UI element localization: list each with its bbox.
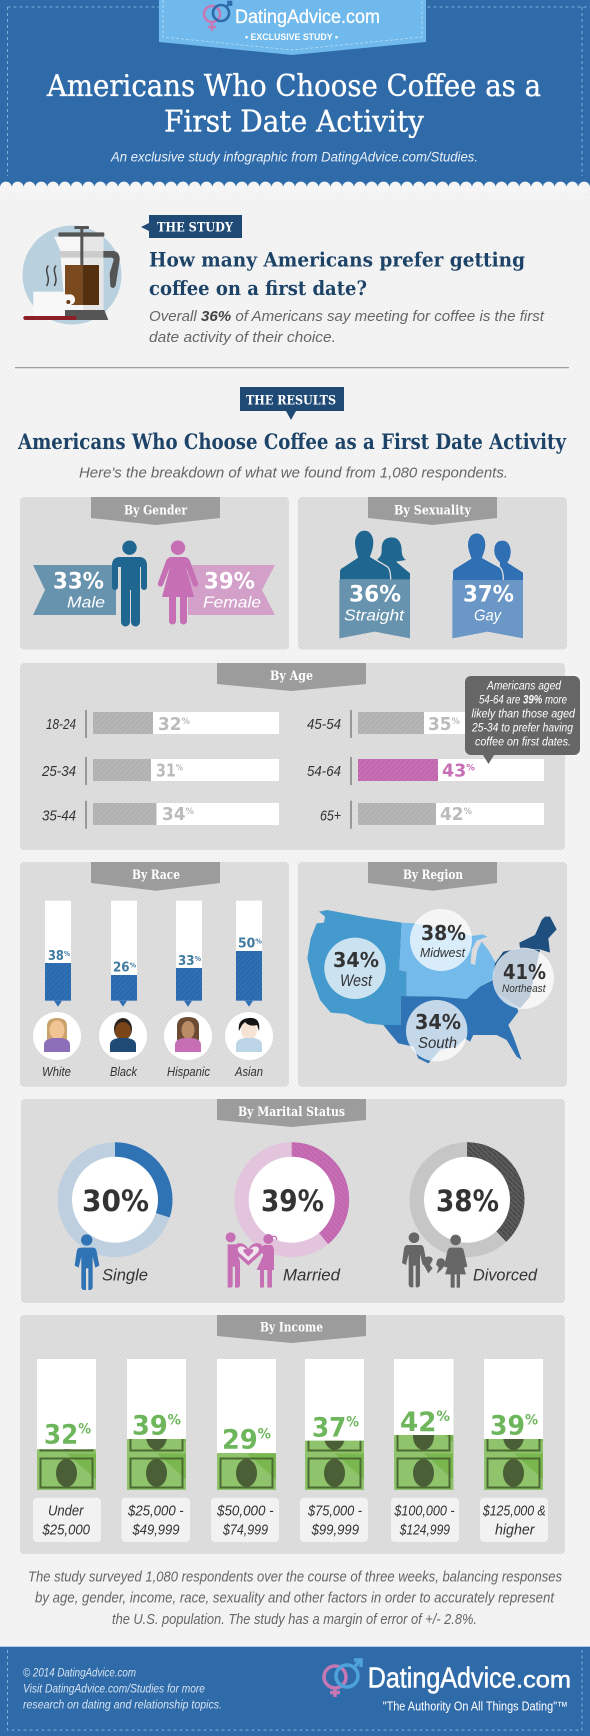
race column: black: Black [110,1064,138,1079]
icon: logo symbols [204,2,231,31]
study question heading: coffee on a first date? [149,276,367,300]
bar row: 35-44: % [186,807,194,817]
panel: by marital status: By Marital Status [238,1105,345,1120]
panel: by marital status [21,1099,565,1303]
footer logo wordmark: DatingAdvice [368,1662,516,1694]
label: single: Single [102,1266,148,1285]
methodology note: by age, gender, income, race, sexuality and other factors in order to accurately represent [35,1591,555,1607]
region bubble: west: West [340,972,373,990]
tag: the study [141,215,242,238]
income column: 100k-125k: $124,999 [399,1521,451,1538]
bar row: 65+: 65+ [320,808,341,825]
tag: the study: THE STUDY [157,221,234,236]
tag: the results: THE RESULTS [246,393,336,408]
icon: straight couple with ribbon [339,530,410,638]
bar row: 25-34: 31 [156,761,181,782]
region bubble: west: 34% [333,948,379,972]
income column: 75k-100k: $75,000 - [307,1503,362,1520]
study question heading: How many Americans prefer getting [149,248,525,272]
callout: 54-64 note: 25-34 to prefer having [471,723,574,735]
icon: married couple with heart [226,1232,277,1288]
female ribbon [188,565,275,615]
panel: by income [20,1315,565,1554]
footer copyright text: Visit DatingAdvice.com/Studies for more [23,1683,205,1695]
income column: 25k-50k [122,1359,190,1542]
bar row: 35-44: 35-44 [42,808,76,825]
race column: hispanic: Hispanic [167,1064,210,1079]
race column: white [33,901,81,1079]
donut: single: 30% [82,1184,149,1218]
female ribbon: 39% [204,569,255,594]
icon: straight couple with ribbon: 36% [349,583,401,608]
results subheading: Here's the breakdown of what we found from 1,080 respondents. [79,464,508,481]
race column: asian: % [255,938,262,946]
income column: 50k-75k: $74,999 [222,1521,269,1538]
race column: white: 38 [48,949,66,964]
header band [0,0,590,194]
subtitle: An exclusive study infographic from DatingAdvice.com/Studies. [110,150,478,165]
race column: white: % [64,950,70,958]
banner caption: • EXCLUSIVE STUDY • [245,32,339,43]
bar row: 54-64 highlighted: 43 [442,761,467,782]
footer logo wordmark: .com [516,1666,571,1692]
bar row: 18-24: % [182,717,190,727]
icon: footer logo symbols [324,1660,361,1697]
income column: 25k-50k: $49,999 [132,1521,180,1538]
study text: date activity of their choice. [149,329,336,346]
race column: black [99,901,147,1079]
male ribbon [33,565,116,615]
income column: 100k-125k [391,1359,459,1542]
logo banner [159,0,426,55]
bar row: 25-34: % [176,764,183,774]
income column: under 25k: 32 [44,1419,82,1450]
panel: by race: By Race [132,868,180,883]
icon: french press and coffee cup [22,226,122,324]
panel: by region: By Region [403,868,463,883]
male ribbon: 33% [53,569,104,594]
race column: black: % [130,962,136,970]
study text: Overall 36% of Americans say meeting for coffee is the first [149,308,545,325]
donut: divorced [417,1150,517,1250]
label: married: Married [283,1266,341,1285]
male ribbon: Male [67,594,105,611]
income column: 100k-125k: 42 [400,1407,438,1438]
race column: asian [225,901,273,1079]
income column: 75k-100k: % [346,1415,359,1431]
panel: by age [20,663,580,850]
income column: 75k-100k [300,1359,368,1542]
callout: 54-64 note: likely than those aged [472,709,576,721]
callout: 54-64 note [465,676,580,764]
bar row: 35-44 [42,801,279,829]
region bubble: northeast: 41% [503,960,546,984]
income column: 75k-100k: $99,999 [311,1521,360,1538]
footer copyright text: © 2014 DatingAdvice.com [23,1668,136,1680]
panel: by race [20,862,289,1087]
race column: hispanic [164,901,212,1079]
income column: 50k-75k: % [258,1426,271,1442]
donut: married [242,1150,342,1250]
callout: 54-64 note: Americans aged [486,680,562,692]
region bubble: midwest: Midwest [420,945,466,960]
icon: male figure [112,540,147,626]
income column: 125k and higher: higher [495,1521,535,1538]
income column: 25k-50k: % [168,1412,181,1428]
region bubble: south: 34% [415,1010,461,1034]
income column: under 25k [33,1359,101,1542]
methodology note [28,1570,562,1628]
bar row: 45-54: 45-54 [307,716,341,733]
income column: 50k-75k [211,1359,279,1542]
study text [149,308,545,346]
panel: by income: By Income [260,1321,323,1336]
icon: divorced couple with broken heart [402,1232,467,1288]
income column: 25k-50k: $25,000 - [127,1503,184,1520]
bar row: 54-64 highlighted: % [466,764,475,774]
title: Americans Who Choose Coffee as a [46,69,541,104]
panel: by gender: By Gender [124,503,187,518]
footer tagline: "The Authority On All Things Dating"™ [383,1700,568,1714]
donut: divorced: 38% [436,1184,499,1218]
callout: 54-64 note: 54-64 are 39% more [479,694,567,706]
income column: 50k-75k: 29 [222,1424,260,1455]
footer copyright text: research on dating and relationship topics. [23,1699,222,1711]
icon: gay couple with ribbon: 37% [463,583,514,608]
bar row: 54-64 highlighted [307,757,544,785]
race column: asian: Asian [234,1064,263,1079]
region bubble: south: South [418,1035,457,1052]
income column: under 25k: $25,000 [42,1521,91,1538]
study question heading [149,248,525,300]
icon: female figure [158,540,198,624]
footer band [0,1647,590,1736]
panel: by sexuality: By Sexuality [394,503,471,518]
bar row: 65+: % [464,807,472,817]
icon: gay couple with ribbon [452,533,523,638]
female ribbon: Female [203,594,261,611]
bar row: 25-34: 25-34 [41,763,76,780]
tag: the results [240,387,344,420]
methodology note: the U.S. population. The study has a margin of error of +/- 2.8%. [112,1612,477,1628]
bar row: 54-64 highlighted: 54-64 [307,763,341,780]
title: First Date Activity [164,105,424,140]
income column: 125k and higher [480,1359,548,1542]
race column: hispanic: 33 [178,954,196,969]
income column: under 25k: % [78,1421,91,1437]
income column: 125k and higher: $125,000 & [482,1503,546,1520]
race column: black: 26 [113,961,131,976]
income column: 50k-75k: $50,000 - [216,1503,274,1520]
region bubble: south [406,1000,467,1061]
income column: 25k-50k: 39 [132,1410,170,1441]
bar row: 25-34 [41,757,279,785]
donut: single [65,1150,165,1250]
bar row: 45-54: % [452,717,460,727]
icon: single person [75,1234,99,1290]
bar row: 65+: 42 [440,804,465,825]
bar row: 18-24: 32 [158,714,183,735]
callout: 54-64 note: coffee on first dates. [475,737,571,749]
income column: 75k-100k: 37 [312,1413,350,1444]
panel: by age: By Age [270,669,313,684]
panel: by region [298,862,567,1087]
race column: hispanic: % [195,955,201,963]
region bubble: northeast [493,948,554,1009]
bar row: 18-24 [46,710,279,738]
label: divorced: Divorced [473,1266,538,1285]
logo wordmark: DatingAdvice.com [235,7,380,28]
icon: gay couple with ribbon: Gay [474,608,502,625]
race column: white: White [42,1064,71,1079]
region bubble: midwest: 38% [421,921,466,945]
title [46,69,541,140]
bar row: 18-24: 18-24 [46,716,76,733]
income column: 100k-125k: % [436,1409,450,1425]
US map [307,910,557,1063]
donut: married: 39% [261,1184,324,1218]
panel: by gender [20,497,289,650]
footer copyright text [23,1668,222,1711]
bar row: 65+ [320,801,544,829]
race column: asian: 50 [238,937,256,952]
income column: 125k and higher: % [525,1412,538,1428]
income column: 100k-125k: $100,000 - [394,1503,455,1520]
region bubble: northeast: Northeast [502,983,546,995]
income column: under 25k: Under [48,1503,84,1520]
bar row: 35-44: 34 [162,804,187,825]
bar row: 45-54: 35 [428,714,453,735]
region bubble: west [324,938,386,999]
panel: by sexuality [298,497,567,650]
region bubble: midwest [410,909,472,971]
bar row: 45-54 [307,710,544,738]
income column: 125k and higher: 39 [490,1410,528,1441]
icon: straight couple with ribbon: Straight [344,608,405,625]
